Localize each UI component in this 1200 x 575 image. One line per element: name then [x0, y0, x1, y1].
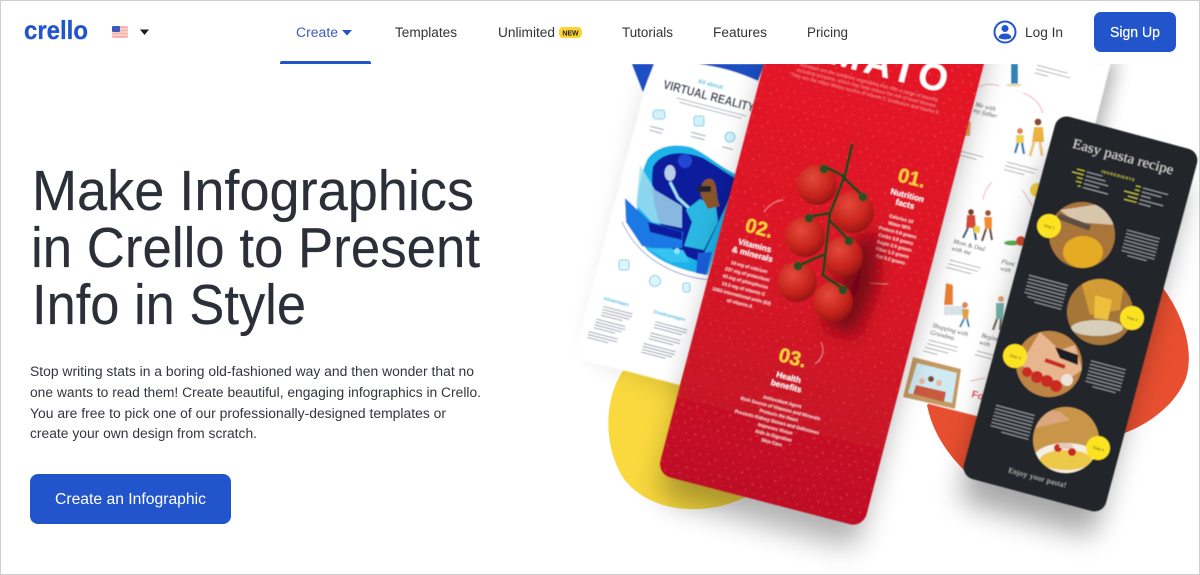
step 1 photo: [1045, 198, 1120, 273]
intro text: Tomatoes are the nutritious vegetables that offer a range of benefits: [798, 62, 939, 104]
section 03: Antioxidant Agent: [763, 394, 802, 409]
nav item: unlimited: [498, 25, 582, 40]
caption: plant: [999, 258, 1016, 275]
section 02: of vitamin A: [726, 298, 754, 309]
recipe card shadow: [958, 149, 1188, 537]
yellow step badges: Step 4: [1092, 445, 1105, 453]
navigation bar: [24, 12, 1176, 64]
thin curved connectors: [764, 200, 888, 364]
pink arrows: [970, 84, 1043, 381]
ingredients heading: INGREDIENTS: [1101, 170, 1136, 182]
intro paragraph: Stop writing stats in a boring old-fashioned way and then wonder that no: [30, 364, 474, 379]
call to action button: [30, 474, 231, 524]
card shadow: [602, 88, 680, 399]
section 01: facts: [895, 198, 916, 211]
section 03: Aids in Digestion: [755, 428, 792, 443]
figure: mom and dad with child: [963, 209, 992, 241]
icon: language caret: [140, 30, 149, 35]
feature labels: [649, 126, 733, 150]
navy interior: [652, 153, 738, 262]
section 02: 237 mg of potassium: [725, 266, 770, 282]
icon: user: [994, 22, 1016, 42]
advantages column: [587, 296, 632, 347]
step 3 photo: [1015, 330, 1085, 400]
panel: family timeline infographic: [890, 60, 1118, 422]
panel: pasta recipe infographic: [961, 114, 1200, 514]
section 01: Nutrition: [890, 187, 925, 204]
tablet: [664, 165, 676, 181]
top note: [1034, 64, 1070, 79]
yellow step badges: Step 1: [1043, 223, 1056, 231]
tomato vine: [777, 145, 874, 322]
icon: US flag: [112, 26, 128, 38]
section 01: Fat 0.2 grams: [876, 253, 906, 266]
card body and content: [657, 0, 1014, 528]
small figure at left: [964, 121, 972, 136]
card sheet: [890, 64, 1110, 422]
card body: [961, 114, 1200, 514]
section 01: [871, 163, 934, 267]
section 01: Fiber 1.2 grams: [875, 246, 910, 259]
intro paragraph: create your own design from scratch.: [30, 426, 257, 441]
nav item: features: Features: [713, 25, 767, 40]
intro paragraph: one wants to read them! Create beautiful, engaging infographics in Crello.: [30, 385, 481, 400]
intro paragraph: You are free to pick one of our professionally-designed templates or: [30, 406, 447, 421]
nav item: unlimited: Unlimited: [498, 25, 555, 40]
orbit ring: [622, 222, 712, 280]
main heading: Info in Style: [32, 273, 306, 337]
figure: grown-up: [993, 296, 1004, 330]
section 01: Calories 18: [889, 213, 914, 224]
section 02: 43 mg of phosphorus: [722, 273, 769, 290]
title: TOMATO: [767, 16, 956, 103]
sign up button: Sign Up: [1110, 25, 1160, 41]
log in link: Log In: [1025, 25, 1063, 40]
logo: crello: [24, 15, 88, 45]
main heading: in Crello to Present: [31, 216, 480, 280]
step 4 photo: [1030, 405, 1102, 477]
text below shopping: [923, 339, 958, 359]
figure: mother and child: [1015, 118, 1044, 156]
caption: mom and dad with me: Mom & Dad: [952, 238, 986, 253]
yellow step badges: Step 2: [1126, 315, 1139, 323]
step 2 photo: [1065, 278, 1135, 348]
section 02: 1063 international units (IU): [712, 286, 772, 306]
bottom feature icons: [619, 260, 690, 292]
section 03: [729, 337, 839, 456]
top feature icons: [653, 110, 735, 142]
nav item: create: Create: [296, 25, 338, 40]
section 03: Skin Care: [761, 437, 783, 448]
picture frame: [903, 357, 961, 409]
blue corner shapes: [632, 64, 654, 92]
panel: tomato infographic: [657, 0, 1014, 528]
advantages column: Advantages: [603, 296, 630, 307]
section 01: Water 95%: [888, 220, 911, 231]
orange sliver behind frame: [898, 383, 900, 394]
section 02: 14.3 mg of vitamin C: [721, 281, 766, 297]
section 01: Carbs 3.9 grams: [878, 232, 914, 246]
panel: virtual reality infographic: [586, 64, 764, 399]
main heading: Make Infographics: [32, 159, 474, 223]
section 02: 02.: [743, 215, 775, 243]
active nav underline: [280, 61, 371, 64]
section 03: Health: [775, 370, 802, 385]
translucent chart panel: [636, 165, 682, 228]
hair: [701, 179, 720, 209]
tomato shadow: [825, 230, 878, 335]
caption: plant: with: [999, 265, 1012, 275]
caption: me with my father: [972, 102, 998, 118]
caption: shopping with grandma: Grandma: [929, 329, 955, 342]
call to action button: Create an Infographic: [55, 491, 206, 508]
section 01: Protein 0.9 grams: [878, 225, 917, 240]
recipe title: Easy pasta recipe: [1071, 137, 1175, 178]
card sheet: [578, 64, 770, 385]
intro text: They are the major dietary source of vitamin C, potassium and vitamin K.: [790, 72, 941, 117]
section 02: 18 mg of calcium: [730, 260, 768, 274]
red card shadow: [657, 0, 1013, 549]
right-hand card shadow: [1094, 64, 1125, 128]
yellow step badges: [1003, 214, 1144, 460]
nav item: templates: Templates: [395, 25, 457, 40]
text beside small figure: [958, 151, 983, 161]
section 01: Sugar 2.6 grams: [876, 239, 913, 253]
disadvantages column: Disadvantages: [653, 309, 686, 322]
ingredient lists: [1069, 168, 1168, 210]
intro text: including lycopene, which may help reduce the risk of heart disease.: [796, 67, 938, 110]
figure: person standing: [1006, 64, 1022, 86]
yellow circle behind recipe card: [1030, 183, 1044, 197]
orange blob: [927, 288, 1189, 474]
section 02: Vitamins: [737, 237, 773, 255]
section 01: 01.: [895, 165, 928, 193]
card title: VIRTUAL REALITY: [662, 78, 757, 115]
text below mother and child: [1004, 162, 1038, 178]
section 03: 03.: [776, 344, 809, 373]
cyan blob: [637, 146, 740, 275]
caption: me with my father: Me with: [974, 101, 996, 113]
section 03: benefits: [770, 378, 803, 395]
VR illustration: [622, 146, 740, 280]
caption: beginning: with: [978, 339, 991, 349]
section 03: Protects the Heart: [759, 408, 799, 423]
lower cyan band: [647, 248, 690, 262]
hero collage of infographic templates: [578, 0, 1200, 549]
nav item: pricing: Pricing: [807, 25, 848, 40]
caption: beginning: Beginning: [980, 332, 1008, 346]
intro paragraph: [30, 364, 481, 441]
red heading: For: [970, 389, 989, 404]
caption: me with my father: my father: [972, 107, 998, 120]
nav item: tutorials: Tutorials: [622, 25, 673, 40]
card title: All about: [697, 79, 723, 91]
blue display panel: [625, 198, 683, 248]
caption: shopping with grandma: Shopping with: [931, 322, 969, 338]
caption: plant: Plant: [1000, 258, 1016, 268]
yellow blob: [608, 360, 746, 510]
step text blocks: [990, 230, 1160, 439]
text below beginning: [975, 351, 994, 359]
section 03: Improves Vision: [757, 422, 793, 436]
nav item: unlimited: NEW: [562, 30, 579, 38]
section 02: [710, 211, 791, 313]
disadvantages column: [641, 309, 687, 362]
main heading: [31, 159, 480, 337]
caption: mom and dad with me: with me: [950, 245, 972, 257]
plant illustration: [1004, 236, 1026, 246]
figure: shopping with grandma: [944, 283, 966, 315]
section 02: & minerals: [731, 245, 774, 264]
arm: [670, 182, 690, 209]
text below mom and dad: [946, 259, 981, 276]
section 03: Rich Source of Vitamins and Minerals: [740, 396, 821, 421]
figure: shopper: [960, 302, 969, 327]
sign up button: [1094, 12, 1176, 52]
torso: [684, 199, 718, 250]
section 03: Prevents Kidney Stones and Gallstones: [734, 409, 820, 436]
headset: [697, 186, 711, 192]
yellow step badges: Step 3: [1009, 353, 1022, 361]
recipe closing line: Enjoy your pasta!: [1007, 465, 1068, 490]
